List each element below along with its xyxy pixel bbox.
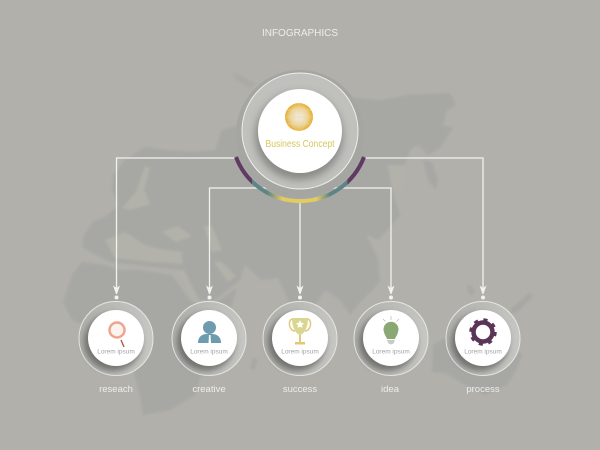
node label: Business Concept — [266, 139, 335, 150]
caption: Lorem ipsum — [464, 348, 502, 356]
world map — [63, 72, 533, 415]
label: success: success — [283, 384, 317, 395]
label: idea: idea — [381, 384, 400, 395]
node: idea — [354, 302, 428, 376]
caption: Lorem ipsum — [190, 348, 228, 356]
icon: magnifier — [110, 322, 124, 347]
label: process: process — [466, 384, 500, 395]
map seas — [105, 166, 404, 304]
icon: light bulb — [383, 316, 399, 344]
icon: trophy — [289, 318, 311, 344]
label: creative: creative — [192, 384, 226, 395]
icon: person — [198, 321, 221, 343]
caption: Lorem ipsum — [97, 348, 135, 356]
colored arc — [236, 157, 364, 201]
node: creative — [172, 302, 246, 376]
icon: globe — [285, 103, 313, 131]
arrowheads — [113, 286, 486, 300]
caption: Lorem ipsum — [281, 348, 319, 356]
central node: business concept — [236, 70, 364, 201]
node: success — [263, 302, 337, 376]
node: reseach — [79, 302, 153, 376]
title: INFOGRAPHICS — [262, 28, 338, 39]
node: process — [446, 302, 520, 376]
connector lines — [116, 158, 483, 288]
label: reseach: reseach — [99, 384, 133, 395]
caption: Lorem ipsum — [372, 348, 410, 356]
icon: gear — [470, 320, 496, 344]
